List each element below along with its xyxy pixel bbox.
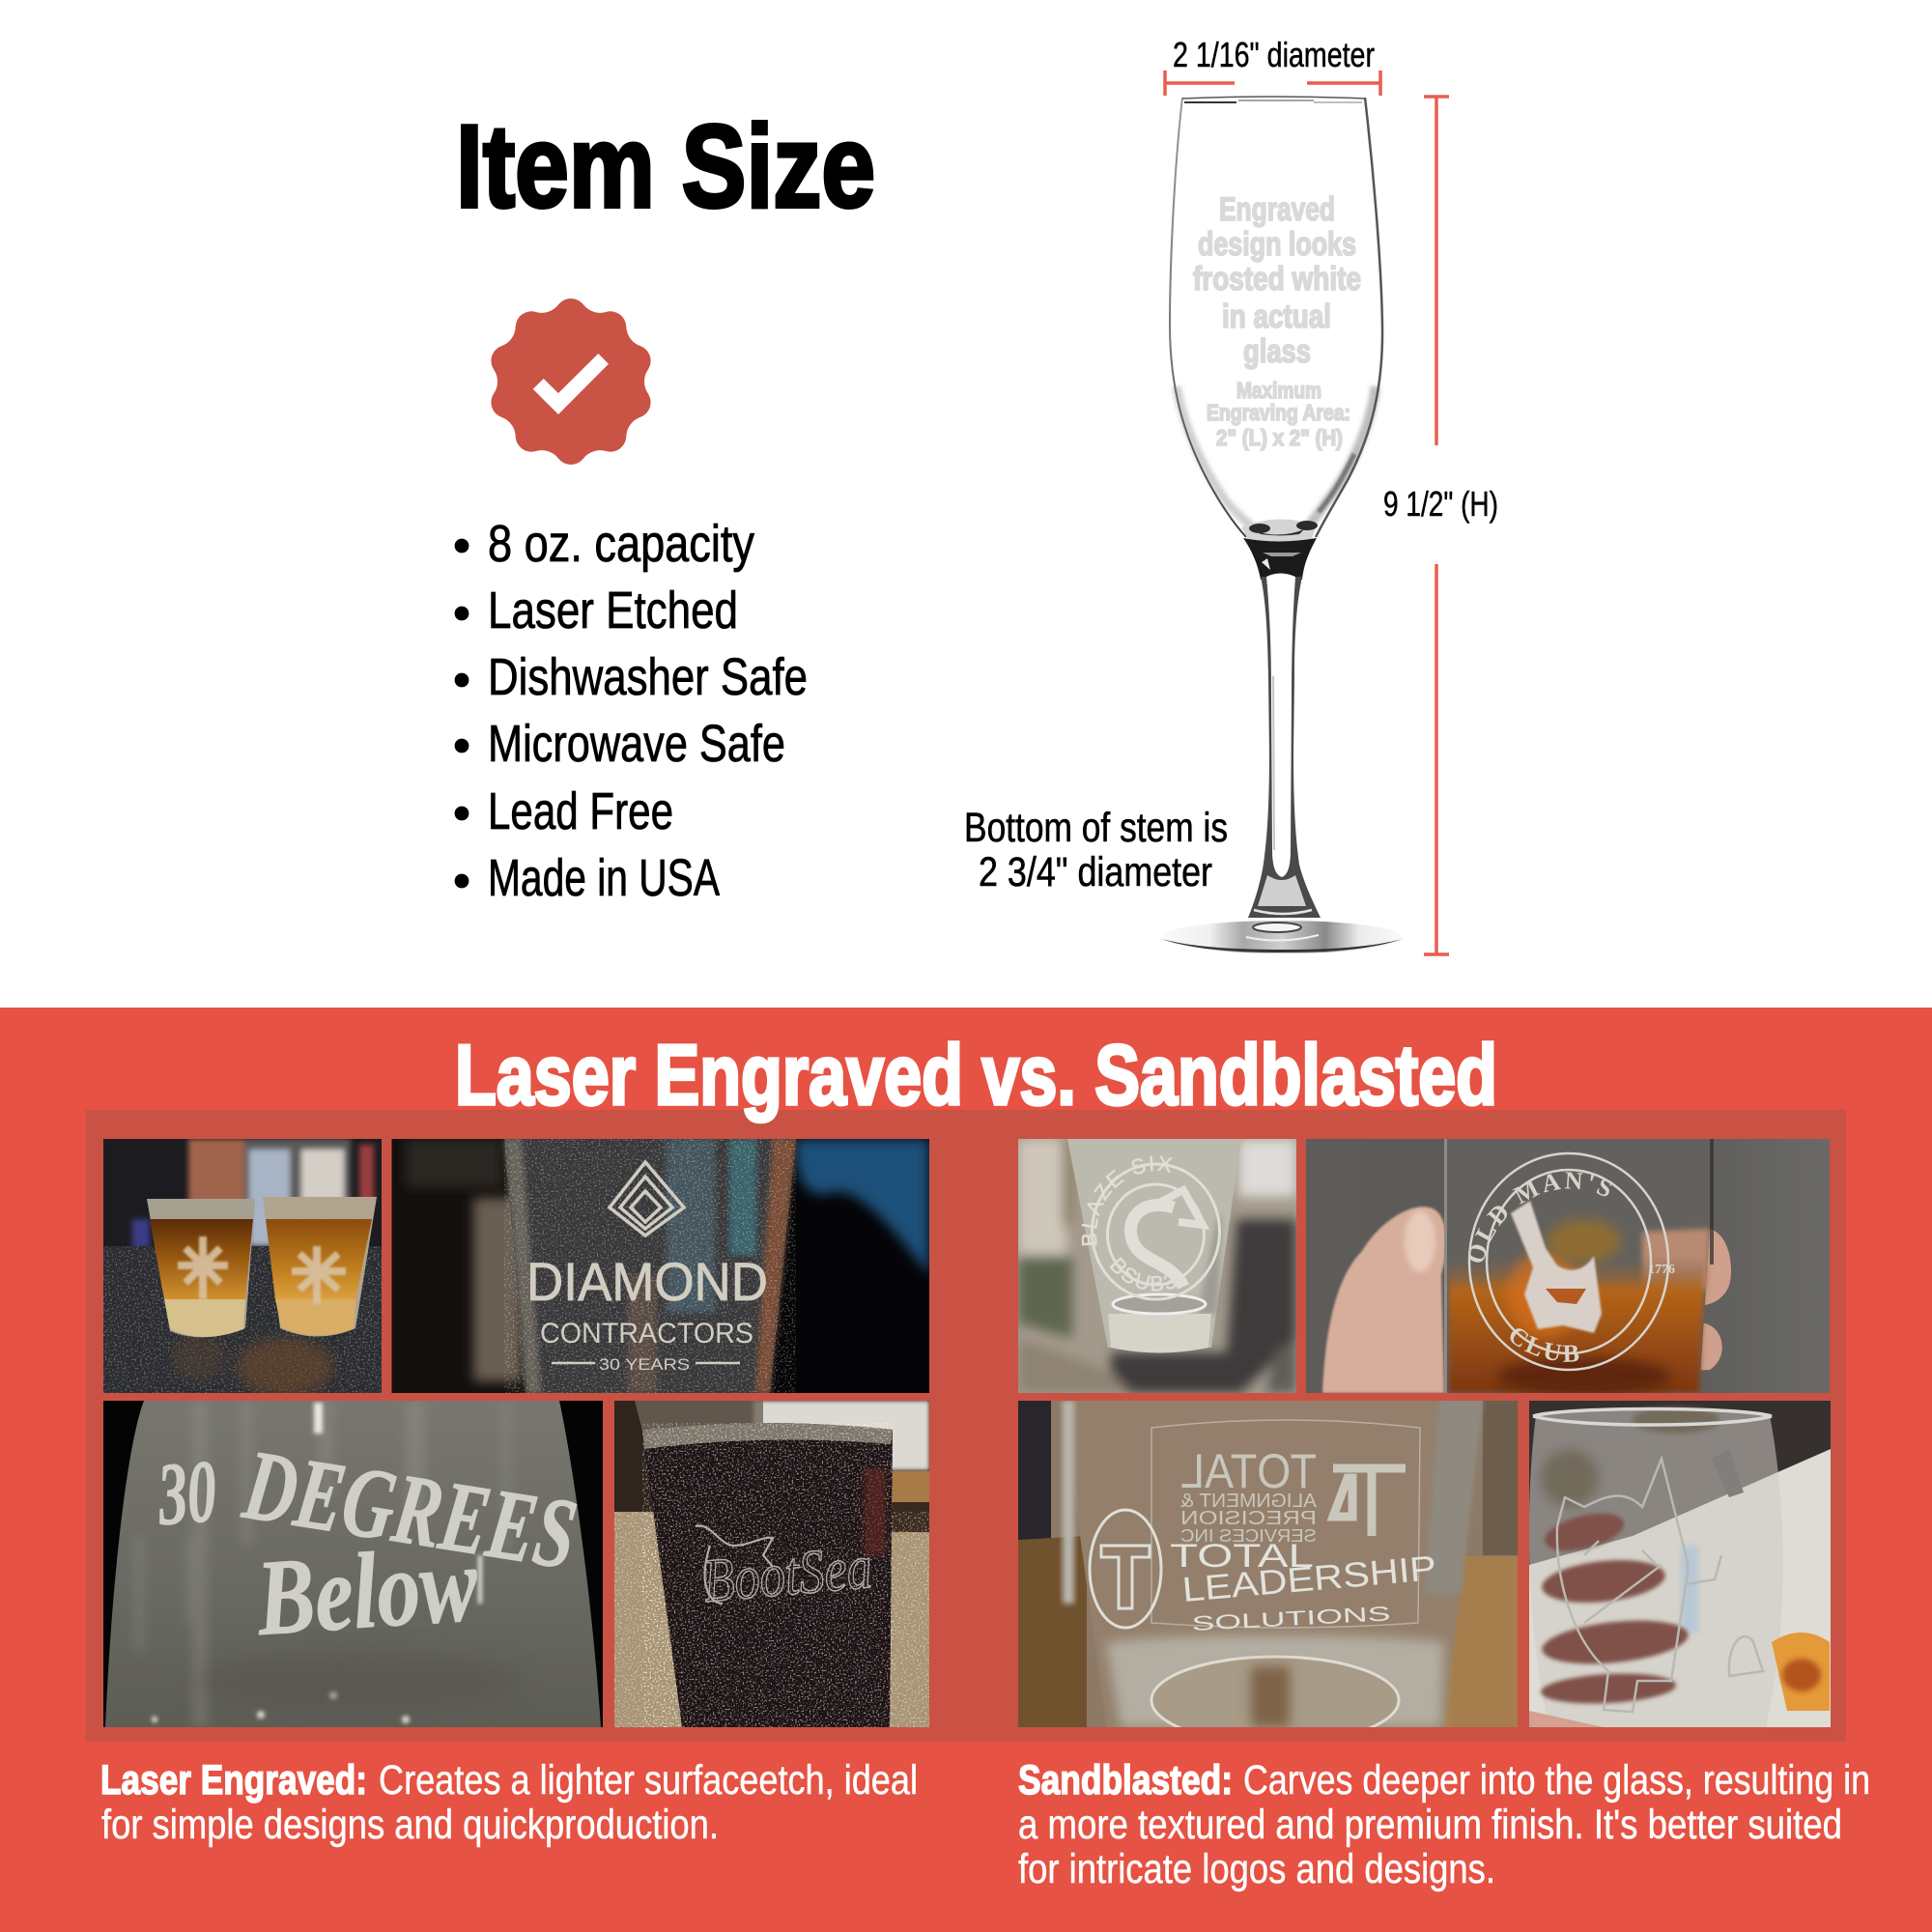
boot signature [696,1524,871,1605]
engraved design note: design looks [1198,226,1356,263]
photo: diamond contractors pint glass: CONTRACTORS [540,1318,753,1350]
bowl wall shading [1177,386,1253,527]
bearded face [1511,1201,1602,1333]
boot signature: BootSea [700,1532,875,1615]
mirrored logo text: ALIGNMENT & [1179,1491,1317,1512]
photo: cola glass with boot signature [614,1401,929,1727]
photo: cat stemless wine glass [1529,1401,1831,1727]
icon: verified check badge [491,298,651,465]
photo: old man's club whiskey glass: CLUB [1511,1328,1578,1362]
caption: sandblasted: for intricate logos and designs. [1018,1846,1495,1892]
caption: laser engraved: for simple designs and quickproduction. [101,1802,719,1848]
mirrored logo text: PRECISION [1180,1508,1317,1529]
caption: laser engraved [100,1757,918,1848]
engraved design note [1193,191,1361,450]
base disc [1161,921,1403,953]
neck funnel [1243,538,1317,580]
feature list [455,515,808,907]
caption: laser engraved: Creates a lighter surfaceetch, ideal [379,1757,918,1804]
engraved design note: 2" (L) x 2" (H) [1216,425,1343,450]
stem [1248,577,1321,918]
feature list: 8 oz. capacity [488,515,754,573]
feature list: Microwave Safe [488,715,785,773]
dimension: total height [1383,97,1498,954]
caption: laser engraved: Laser Engraved: [100,1757,367,1804]
photo: diamond contractors pint glass: 30 YEARS [599,1355,690,1374]
photo: total leadership glass [1018,1401,1518,1744]
photo: total leadership glass: TOTAL [1170,1538,1314,1575]
engraved design note: in actual [1222,298,1331,335]
photo: engraved shot glasses [103,1139,382,1396]
mirrored logo text: SERVICES INC [1180,1526,1317,1546]
feature list: Lead Free [488,782,673,840]
dimension: rim diameter [1165,35,1380,96]
dimension: total height: 9 1/2" (H) [1383,484,1498,524]
section background: red comparison band [0,1008,1932,1932]
heading: laser engraved vs sandblasted: Laser Engraved vs. Sandblasted [455,1027,1497,1122]
photo: old man's club whiskey glass: 1776 [1648,1263,1675,1277]
dimension: rim diameter: 2 1/16" diameter [1173,35,1375,74]
photo: old man's club whiskey glass [1306,1139,1830,1393]
dimension: stem bottom note [964,805,1228,895]
photo: blaze six dragon shot glass [1018,1139,1296,1393]
caption: sandblasted: Sandblasted: [1018,1757,1233,1804]
hand behind glass [1540,1506,1690,1707]
photo: 30 degrees below carafe: Below [252,1523,482,1659]
hand [1322,1207,1446,1393]
photo: blaze six dragon shot glass: BSUB3 [1109,1257,1177,1292]
photo: 30 degrees below carafe: 30 [155,1441,219,1544]
photo: diamond contractors pint glass [391,1139,929,1393]
mirrored logo text: TOTAL [1180,1444,1317,1498]
title: item size: Item Size [456,100,875,232]
section: item size [455,100,875,907]
dimension: stem bottom note: Bottom of stem is [964,805,1228,851]
mirrored logo text [1180,1454,1317,1542]
feature list: Dishwasher Safe [488,648,808,706]
champagne flute illustration [1161,97,1403,953]
engraved design note: Engraving Area: [1207,400,1350,425]
feature list: Laser Etched [488,582,738,639]
engraved design note: Maximum [1236,378,1321,403]
engraved design note: Engraved [1219,191,1335,228]
photo: 30 degrees below carafe [103,1401,603,1727]
engraved design note: frosted white [1193,261,1361,298]
dimension: stem bottom note: 2 3/4" diameter [979,849,1212,895]
bowl base lens [1241,519,1317,543]
cat outline [1557,1459,1763,1712]
photo: old man's club whiskey glass: OLD MAN'S [1470,1172,1612,1263]
photo: total leadership glass: SOLUTIONS [1191,1603,1391,1635]
engraved design note: glass [1243,333,1311,370]
photo panel backing [86,1110,1846,1742]
photo: diamond contractors pint glass: DIAMOND [526,1251,768,1312]
feature list: Made in USA [488,849,720,907]
photo: 30 degrees below carafe: DEGREES [237,1429,583,1591]
caption: sandblasted [1018,1757,1870,1892]
photo: total leadership glass: LEADERSHIP [1180,1548,1438,1609]
photo: blaze six dragon shot glass: BLAZE SIX [1082,1155,1173,1246]
